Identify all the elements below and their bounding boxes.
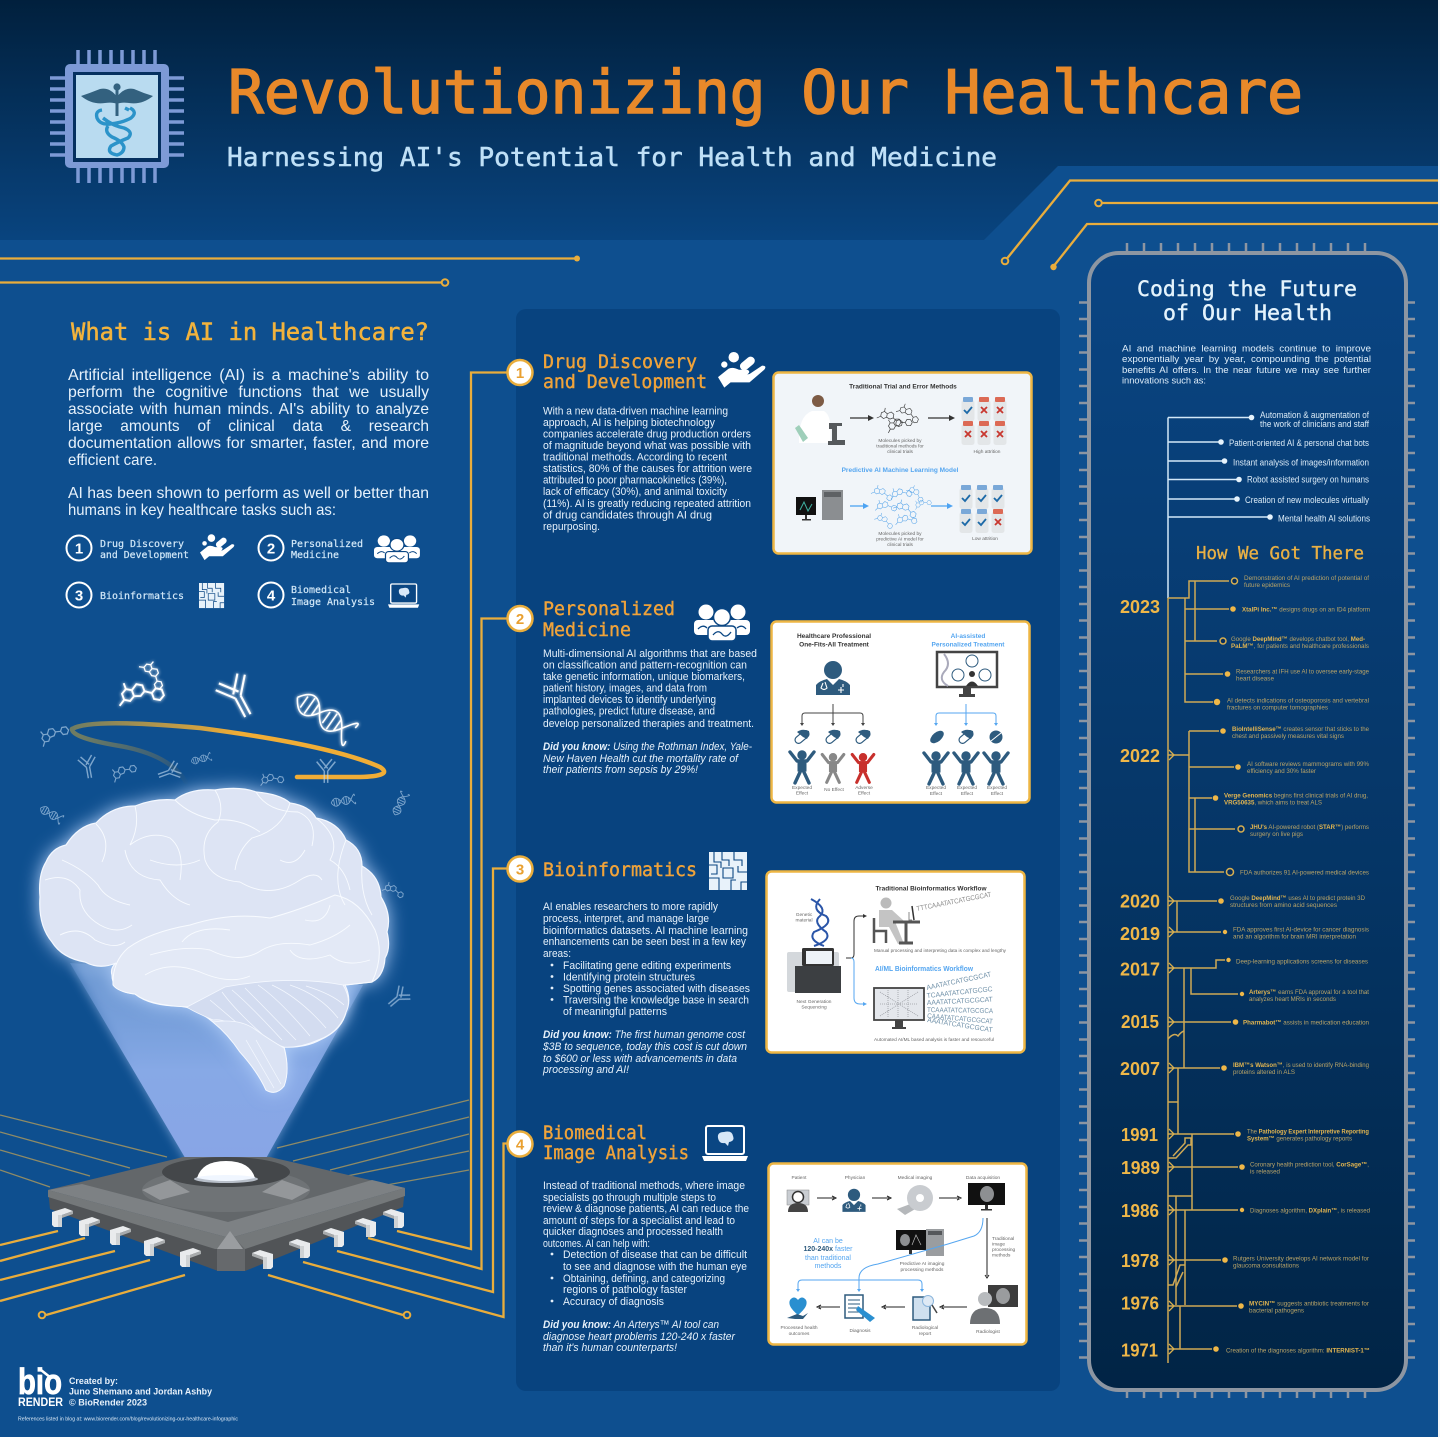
- figure: bioinformatics workflows: Manual processing and interpreting data is complex and lengthy: [874, 948, 1007, 954]
- DNA sequence text: TCAAATATCATGCGC: [926, 986, 993, 1000]
- figure: personalized treatment: AI-assisted: [951, 633, 985, 640]
- number 3: 3: [516, 862, 524, 878]
- DNA sequence text: CAAATATCATGCGCAT: [927, 1013, 994, 1026]
- section 1: drug discovery: [508, 352, 1032, 554]
- body text: Instead of traditional methods, where image: [543, 1180, 745, 1192]
- timeline events text: Coronary health prediction tool, CorSage™,: [1250, 1162, 1369, 1168]
- timeline years: 1971: [1121, 1340, 1158, 1360]
- bullet list: Facilitating gene editing experiments: [563, 960, 731, 972]
- AI computer: [896, 1229, 944, 1256]
- timeline events text: The Pathology Expert Interpretive Reporting: [1247, 1128, 1369, 1136]
- body text: companies accelerate drug production orders: [543, 428, 751, 440]
- heading: coding the future: of Our Health: [1163, 301, 1332, 326]
- connector lines: chip to sections: [0, 372, 507, 1318]
- sequencer: [787, 948, 841, 993]
- bullet list: to see and diagnose with the human eye: [563, 1261, 747, 1273]
- timeline events text: Deep-learning applications screens for diseases: [1236, 958, 1369, 966]
- figure: imaging workflow: [768, 1164, 1026, 1344]
- task 4: 4: [267, 588, 276, 604]
- figure: drug discovery comparison: [774, 372, 1032, 554]
- task 2: [258, 535, 420, 563]
- future items text: Instant analysis of images/information: [1233, 458, 1369, 468]
- heading: [543, 352, 707, 393]
- did you know: Did you know: The first human genome cost: [543, 1029, 746, 1041]
- intro text: [1122, 344, 1372, 386]
- body text: With a new data-driven machine learning: [543, 406, 728, 418]
- text block: AI definition: perform the cognitive functions that we usually: [68, 384, 429, 401]
- section 4: biomedical image analysis: [508, 1123, 1026, 1354]
- icon: circuit chip: [709, 852, 747, 890]
- timeline events text: chest and passively measures vital signs: [1232, 733, 1345, 740]
- body text: of drug candidates through AI drug: [543, 510, 712, 522]
- did you know: than it's human counterparts!: [543, 1342, 677, 1354]
- halo ring: [72, 723, 384, 782]
- did you know: diagnose heart problems 120-240 x faster: [543, 1331, 736, 1343]
- floating icons: molecule, antibody, DNA: [113, 657, 359, 746]
- task 2: Personalized: [291, 539, 363, 550]
- timeline years: 2007: [1120, 1059, 1160, 1079]
- figure: personalized treatment: Effect: [961, 791, 974, 797]
- credits: Created by:: [69, 1376, 118, 1387]
- computer: [796, 490, 843, 520]
- heading: Drug Discovery: [543, 352, 697, 373]
- figure: imaging workflow: Patient: [792, 1175, 807, 1181]
- bullet list: Detection of disease that can be difficult: [563, 1249, 747, 1261]
- timeline events text: PaLM™, for patients and healthcare professionals: [1231, 643, 1370, 650]
- figure: imaging workflow: Predictive AI imaging: [900, 1261, 945, 1267]
- future items text: [1229, 410, 1371, 524]
- heading: and Development: [543, 372, 707, 393]
- figure: imaging workflow: processing: [992, 1247, 1016, 1253]
- figure: imaging workflow: Radiologist: [976, 1329, 1001, 1335]
- task 2: Medicine: [291, 550, 339, 561]
- DNA strand: [811, 899, 828, 946]
- figure: imaging workflow: Radiological: [912, 1325, 938, 1331]
- did you know: their patients from sepsis by 29%!: [543, 764, 698, 776]
- DNA sequence text: AAATATCATGCGCAT: [927, 997, 994, 1007]
- timeline events text: Pharmabot™ assists in medication education: [1243, 1020, 1369, 1026]
- figure: personalized treatment: Personalized Treatment: [932, 642, 1005, 648]
- timeline events text: [1224, 575, 1370, 1354]
- figure: personalized treatment: Effect: [930, 791, 943, 797]
- icon: hand with pills: [718, 352, 765, 388]
- AI speed note: than traditional: [805, 1255, 851, 1262]
- timeline events text: future epidemics: [1244, 582, 1291, 589]
- heart in hand: [787, 1298, 808, 1319]
- hologram light cone: [70, 963, 363, 1178]
- future items text: Patient-oriented AI & personal chat bots: [1229, 438, 1370, 448]
- task 1: Drug Discovery: [100, 539, 184, 550]
- timeline markers: [1169, 750, 1174, 1354]
- task 1: and Development: [100, 550, 189, 561]
- heading: What is AI in Healthcare?: What is AI in Healthcare?: [71, 318, 429, 346]
- did you know: [543, 1319, 736, 1354]
- timeline years: [1120, 597, 1160, 1360]
- figure: personalized treatment: Expected: [792, 785, 812, 791]
- references note: References listed in blog at: www.biorender.com/blog/revolutionizing-our-healthcare-infographic: [18, 1416, 238, 1422]
- timeline events text: XtalPi Inc.™ designs drugs on an ID4 platform: [1242, 606, 1370, 614]
- future items text: Automation & augmentation of: [1260, 410, 1369, 420]
- heading: [543, 599, 675, 641]
- figure: personalized treatment: Expected: [987, 785, 1007, 791]
- timeline events text: System™ generates pathology reports: [1247, 1136, 1353, 1142]
- did you know: New Haven Health cut the mortality rate of: [543, 753, 739, 765]
- body text: [543, 648, 757, 730]
- body text: process, interpret, and manage large: [543, 913, 709, 925]
- body text: lack of efficacy (30%), and animal toxicity: [543, 486, 727, 498]
- text block: AI definition: [68, 367, 429, 469]
- figure: imaging workflow: processing methods: [901, 1267, 944, 1273]
- bullet list: Accuracy of diagnosis: [563, 1296, 664, 1308]
- figure: personalized treatment: Healthcare Professional: [797, 633, 871, 640]
- figure: personalized treatment: Adverse: [855, 785, 873, 791]
- subtitle: Harnessing AI's Potential for Health and Medicine: [227, 143, 997, 173]
- body text: statistics, 80% of the causes for attrition were: [543, 463, 752, 475]
- circuit lines: header right: [1002, 180, 1438, 270]
- heading: coding the future: Coding the Future: [1137, 277, 1357, 302]
- figure: imaging workflow: report: [919, 1331, 932, 1337]
- logo: BioRender: RENDER: [18, 1397, 64, 1409]
- future items text: Mental health AI solutions: [1278, 514, 1371, 524]
- number 1: [508, 360, 532, 385]
- DNA sequence text: AAATATCATGCGCAT: [926, 971, 993, 992]
- timeline events text: JHU's AI-powered robot (STAR™) performs: [1250, 824, 1370, 831]
- number 2: 2: [516, 611, 524, 628]
- timeline events text: analyzes heart MRIs in seconds: [1249, 996, 1337, 1003]
- figure: personalized treatment: [772, 622, 1030, 802]
- future items text: Creation of new molecules virtually: [1245, 495, 1370, 505]
- timeline events text: and an algorithm for brain MRI interpretation: [1233, 934, 1356, 940]
- body text: pathologies, predict future disease, and: [543, 706, 715, 718]
- heading: how we got there: How We Got There: [1196, 544, 1364, 564]
- figure: imaging workflow: Traditional: [992, 1236, 1014, 1242]
- did you know: [542, 1029, 747, 1076]
- small faded icons: [35, 717, 412, 1012]
- figure: imaging workflow: Diagnosis: [849, 1328, 871, 1334]
- body text: amount of steps for a specialist and lead to: [543, 1215, 735, 1227]
- radiologist: [970, 1285, 1018, 1324]
- icon: chip with caduceus: [50, 50, 184, 183]
- title: Revolutionizing Our Healthcare: [228, 58, 1303, 128]
- report icon: [913, 1296, 937, 1320]
- timeline events text: MYCIN™ suggests antibiotic treatments for: [1249, 1300, 1370, 1308]
- task 3: Bioinformatics: [100, 591, 184, 602]
- header band: [0, 0, 1440, 240]
- circuit lines: header left: [0, 256, 580, 286]
- logo: BioRender: bio: [18, 1361, 62, 1402]
- icon: people with DNA: [694, 604, 750, 641]
- task 1: 1: [75, 540, 83, 558]
- timeline events text: IBM™s Watson™, is used to identify RNA-binding: [1233, 1062, 1369, 1069]
- body text: implanted devices to identify underlying: [543, 694, 716, 706]
- body text: bioinformatics datasets. AI machine learning: [543, 925, 748, 937]
- number 1: 1: [516, 365, 524, 382]
- did you know: processing and AI!: [542, 1064, 629, 1076]
- timeline events text: FDA authorizes 91 AI-powered medical devices: [1240, 870, 1370, 876]
- credits: Juno Shemano and Jordan Ashby: [69, 1386, 213, 1398]
- figure: personalized treatment: Effect: [991, 791, 1004, 797]
- figure: drug discovery comparison: predictive AI model for: [876, 536, 924, 542]
- timeline events text: is released: [1250, 1168, 1280, 1176]
- timeline events text: AI detects indications of osteoporosis and vertebral: [1227, 698, 1369, 704]
- section 3: bioinformatics: [508, 852, 1024, 1076]
- bullet list: [551, 1249, 747, 1308]
- figure: drug discovery comparison: Molecules picked by: [878, 531, 922, 537]
- body text: AI enables researchers to more rapidly: [543, 901, 718, 913]
- section 2: personalized medicine: [508, 599, 1030, 802]
- timeline years: 1978: [1121, 1251, 1159, 1271]
- bullet list: Obtaining, defining, and categorizing: [563, 1273, 725, 1285]
- key tasks list: [66, 534, 420, 608]
- body text: outcomes. AI can help with:: [543, 1238, 650, 1250]
- intro text: AI and machine learning models continue to improve: [1122, 344, 1371, 354]
- bullet list: [551, 960, 750, 1018]
- cerebellum: [187, 980, 348, 1047]
- intro text: exponentially year by year, compounding the potential: [1122, 354, 1371, 365]
- did you know: [543, 741, 752, 776]
- chip pins: [52, 1208, 404, 1269]
- figure: bioinformatics workflows: material: [795, 918, 813, 924]
- timeline years: 2022: [1120, 746, 1160, 766]
- timeline years: 2023: [1120, 597, 1160, 617]
- timeline events text: proteins altered in ALS: [1233, 1069, 1296, 1076]
- figure: drug discovery comparison: High attrition: [974, 449, 1001, 455]
- figure: imaging workflow: image: [992, 1242, 1005, 1248]
- figure: bioinformatics workflows: [766, 872, 1024, 1052]
- body text: patient history, images, and data from: [543, 682, 707, 694]
- brainstem: [213, 1021, 287, 1092]
- figure: drug discovery comparison: Low attrition: [972, 536, 998, 542]
- heading: Bioinformatics: [543, 860, 697, 881]
- heading: coding the future: [1137, 277, 1357, 326]
- timeline years: 2015: [1121, 1012, 1159, 1032]
- figure: imaging workflow: Processed health: [780, 1325, 818, 1331]
- body text: [543, 1180, 749, 1250]
- timeline years: 1986: [1121, 1201, 1159, 1221]
- figure: bioinformatics workflows: Traditional Bioinformatics Workflow: [875, 886, 987, 892]
- figure: bioinformatics workflows: Genetic: [796, 912, 813, 918]
- future items text: the work of clinicians and staff: [1260, 419, 1370, 429]
- timeline events text: BioIntelliSense™ creates sensor that sticks to the: [1232, 726, 1369, 733]
- figure: personalized treatment: Expected: [926, 785, 946, 791]
- bullet list: Spotting genes associated with diseases: [563, 983, 750, 995]
- clipboard icon: [845, 1295, 875, 1322]
- did you know: Did you know: An Arterys™ AI tool can: [543, 1319, 719, 1331]
- figure: bioinformatics workflows: AI/ML Bioinformatics Workflow: [875, 966, 974, 973]
- number 3: [508, 856, 532, 882]
- figure: personalized treatment: No Effect: [824, 787, 844, 793]
- heading: Image Analysis: [543, 1143, 689, 1164]
- number 4: [508, 1132, 532, 1156]
- text block: AI definition: associate with human minds. AI's ability to analyze: [68, 401, 429, 418]
- body text: approach, AI is helping biotechnology: [543, 417, 715, 429]
- timeline events text: glaucoma consultations: [1233, 1262, 1300, 1270]
- body text: [543, 406, 752, 533]
- timeline events text: Demonstration of AI prediction of potential of: [1244, 575, 1369, 582]
- figure: bioinformatics workflows: Next Generation: [797, 999, 832, 1005]
- figure: imaging workflow: outcomes: [789, 1331, 810, 1337]
- body text: on classification and pattern-recognition can: [543, 660, 747, 672]
- figure: imaging workflow: Physician: [845, 1175, 866, 1181]
- body text: attributed to poor pharmacokinetics (39%),: [543, 474, 727, 486]
- figure: bioinformatics workflows: Sequencing: [801, 1004, 827, 1010]
- text block: AI performance: AI has been shown to perform as well or better than: [68, 485, 429, 502]
- text block: AI performance: [68, 485, 429, 519]
- timeline events text: fractures on computer tomographies: [1227, 704, 1329, 712]
- timeline events text: bacterial pathogens: [1249, 1308, 1305, 1314]
- figure: personalized treatment: Expected: [957, 785, 977, 791]
- task 4: [258, 582, 419, 608]
- credits: [69, 1376, 213, 1408]
- AI monitor: [937, 652, 997, 697]
- figure: drug discovery comparison: Predictive AI Machine Learning Model: [842, 467, 959, 474]
- timeline events text: VRG50635, which aims to treat ALS: [1224, 800, 1323, 806]
- figure: personalized treatment: Effect: [858, 790, 871, 796]
- body text: quicker diagnoses and processed health: [543, 1226, 723, 1238]
- task 3: [66, 582, 224, 608]
- scientist: [795, 395, 845, 445]
- body text: repurposing.: [543, 521, 600, 533]
- AI speed note: AI can be: [813, 1238, 843, 1245]
- number 4: 4: [516, 1136, 525, 1154]
- timeline events text: Diagnoses algorithm, DXplain™, is released: [1250, 1208, 1370, 1214]
- task 4: Image Analysis: [291, 597, 375, 608]
- AI speed note: methods: [815, 1263, 842, 1270]
- brain illustration: [40, 788, 389, 1092]
- patient icon: [787, 1190, 809, 1212]
- person at desk: [874, 898, 920, 944]
- bullet list: Identifying protein structures: [563, 972, 695, 984]
- icon: laptop with brain: [702, 1126, 748, 1161]
- intro text: benefits AI offers. In the near future we may see further: [1122, 365, 1372, 376]
- text block: AI performance: humans in key healthcare tasks such as:: [68, 502, 336, 519]
- heading: Biomedical: [543, 1123, 647, 1144]
- timeline events text: surgery on live pigs: [1250, 831, 1304, 838]
- scan monitor: [968, 1183, 1005, 1210]
- timeline dots: [1213, 578, 1245, 1352]
- computer chip projector: [48, 1157, 405, 1271]
- body text: enhancements can be seen best in a few key: [543, 936, 746, 948]
- body text: of magnitude beyond what was possible with: [543, 440, 751, 452]
- number 2: [508, 606, 532, 631]
- AI speed note: [803, 1238, 853, 1270]
- bullet list: Traversing the knowledge base in search: [563, 994, 749, 1006]
- did you know: Did you know: Using the Rothman Index, Yale-: [543, 741, 752, 753]
- DNA sequence text: TCAAATATCATGCGCA: [927, 1007, 993, 1015]
- timeline events text: heart disease: [1236, 676, 1274, 682]
- timeline events text: Verge Genomics begins first clinical trials of AI drug,: [1224, 792, 1368, 800]
- task 4: Biomedical: [291, 585, 351, 596]
- figure: drug discovery comparison: traditional methods for: [876, 444, 924, 450]
- timeline events text: FDA approves first AI-device for cancer diagnosis: [1233, 926, 1370, 934]
- body text: traditional methods. According to recent: [543, 452, 727, 464]
- timeline events text: Arterys™ earns FDA approval for a tool that: [1249, 989, 1369, 996]
- figure: drug discovery comparison: Traditional Trial and Error Methods: [849, 384, 957, 390]
- panel: applications: [516, 309, 1060, 1391]
- timeline years: 1989: [1121, 1158, 1160, 1178]
- body text: (11%). AI is greatly reducing repeated attrition: [543, 498, 751, 510]
- body text: areas:: [543, 948, 571, 960]
- figure: bioinformatics workflows: TTTCAAATATCATGCGCAT: [916, 891, 993, 913]
- body text: develop personalized therapies and treatment.: [543, 718, 754, 730]
- body text: [543, 901, 748, 960]
- figure: bioinformatics workflows: Automated AI/ML based analysis is faster and resourceful: [874, 1037, 994, 1043]
- figure: imaging workflow: Data acquisition: [966, 1175, 1000, 1181]
- figure: imaging workflow: methods: [992, 1252, 1011, 1258]
- DNA sequence text: AAATATCATGCGCAT: [927, 1017, 994, 1034]
- text block: AI definition: large amounts of clinical data & research: [68, 418, 429, 435]
- figure: drug discovery comparison: clinical trials: [887, 449, 914, 455]
- brain gyri: [45, 790, 372, 980]
- timeline circuit lines: [1168, 581, 1238, 1363]
- figure: personalized treatment: Effect: [796, 790, 809, 796]
- task 2: 2: [267, 540, 275, 558]
- neural network monitor: [874, 988, 924, 1029]
- task 3: 3: [75, 588, 83, 604]
- text block: AI definition: Artificial intelligence (AI) is a machine's ability to: [68, 367, 429, 384]
- timeline events text: Google DeepMind™ develops chatbot tool, Med-: [1231, 636, 1365, 643]
- timeline years: 2017: [1120, 960, 1160, 980]
- temporal lobe: [113, 895, 379, 1007]
- future timeline branches: [1168, 410, 1371, 598]
- did you know: $3B to sequence, today this cost is cut down: [542, 1041, 747, 1053]
- timeline events text: AI software reviews mammograms with 99%: [1247, 761, 1369, 768]
- timeline events text: Creation of the diagnoses algorithm: INTERNIST-1™: [1226, 1348, 1370, 1354]
- timeline events text: Researchers at IFH use AI to oversee early-stage: [1236, 668, 1369, 676]
- figure: imaging workflow: Medical imaging: [898, 1175, 933, 1181]
- credits: © BioRender 2023: [69, 1398, 147, 1408]
- timeline years: 2020: [1120, 892, 1160, 912]
- text block: AI definition: documentation allows for smarter, faster, and more: [68, 435, 429, 452]
- heading: [543, 1123, 689, 1164]
- body text: review & diagnose patients, AI can reduce the: [543, 1203, 749, 1215]
- circuit traces behind chip: [0, 1100, 469, 1188]
- body text: specialists go through multiple steps to: [543, 1192, 716, 1204]
- heading: Personalized: [543, 599, 675, 620]
- figure: personalized treatment: One-Fits-All Treatment: [799, 642, 870, 648]
- timeline events text: Rutgers University develops AI network model for: [1233, 1256, 1370, 1262]
- timeline years: 2019: [1120, 924, 1160, 944]
- timeline years: 1976: [1121, 1294, 1159, 1314]
- bullet list: regions of pathology faster: [563, 1284, 687, 1296]
- panel: coding the future: [1079, 243, 1415, 1398]
- figure: drug discovery comparison: clinical trials: [887, 542, 914, 548]
- AI speed note: 120-240x faster: [803, 1246, 853, 1253]
- body text: take genetic information, unique biomarkers,: [543, 671, 745, 683]
- bullet list: of meaningful patterns: [563, 1006, 667, 1018]
- intro text: innovations such as:: [1122, 376, 1206, 386]
- timeline events text: efficiency and 30% faster: [1247, 768, 1317, 775]
- timeline years: 1991: [1121, 1125, 1158, 1145]
- did you know: to $600 or less with advancements in data: [543, 1053, 737, 1065]
- DNA sequence text: [926, 971, 994, 1034]
- future items text: Robot assisted surgery on humans: [1247, 474, 1370, 484]
- task 1: [66, 534, 234, 561]
- text block: AI definition: efficient care.: [68, 452, 157, 469]
- timeline events text: Google DeepMind™ uses AI to predict protein 3D: [1230, 895, 1365, 902]
- figure: drug discovery comparison: Molecules picked by: [878, 438, 922, 444]
- heading: Medicine: [543, 620, 631, 641]
- body text: Multi-dimensional AI algorithms that are based: [543, 648, 757, 660]
- timeline events text: structures from amino acid sequences: [1230, 902, 1338, 909]
- MRI scanner: [897, 1185, 933, 1215]
